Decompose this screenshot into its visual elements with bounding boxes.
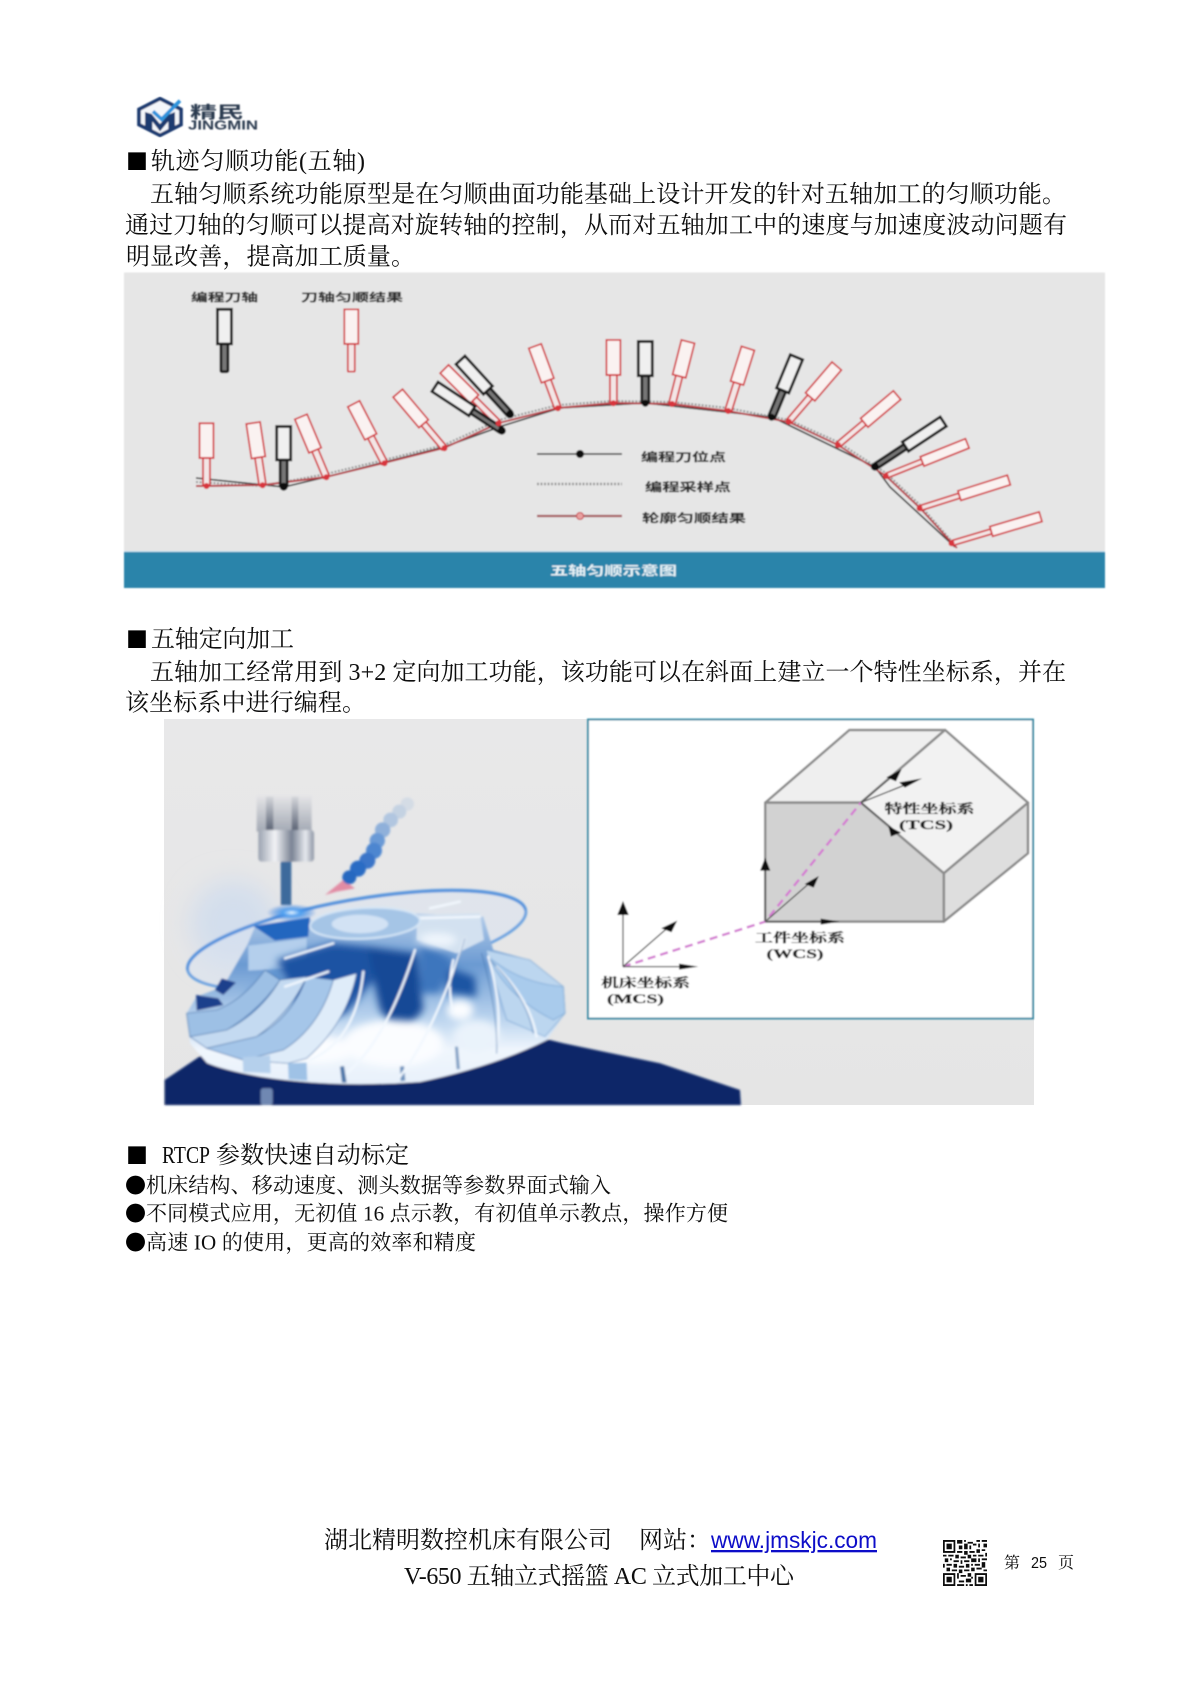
bullet list: ● <box>125 1170 146 1200</box>
shroud ring, rear arc <box>181 870 533 1010</box>
caption band <box>124 551 1105 588</box>
paragraph: trajectory smoothing description <box>125 181 1067 270</box>
coolant hose beads <box>325 797 414 895</box>
right blade group <box>486 950 565 1037</box>
panel: coordinate systems <box>588 720 1033 1018</box>
paragraph: trajectory smoothing description: 明显改善，提高加工质量。 <box>126 244 415 270</box>
spindle holder <box>257 795 314 905</box>
logo wordmark Latin: JINGMIN <box>188 118 258 132</box>
dashed transform links <box>623 803 861 967</box>
impeller body <box>187 913 565 1084</box>
footer product name: V-650 五轴立式摇篮 AC 立式加工中心 <box>404 1563 795 1590</box>
impeller machining illustration <box>165 795 741 1105</box>
legend: contour smoothing result <box>537 511 747 525</box>
label: TCS <box>884 801 975 832</box>
bullet list: 机床结构、移动速度、测头数据等参数界面式输入 <box>146 1174 611 1198</box>
left flared blades <box>187 970 357 1063</box>
shroud ring, front arc <box>188 891 526 970</box>
label: TCS: 特性坐标系 <box>884 801 975 816</box>
bottom blade feet <box>243 1047 460 1083</box>
footer company and website: 网站： <box>639 1527 711 1554</box>
white inset panel <box>588 720 1033 1018</box>
dark notches at the blade tips <box>196 978 236 1011</box>
bright blade faces <box>280 933 500 1067</box>
upper left blade block <box>248 938 307 971</box>
legend: contour smoothing result: 轮廓匀顺结果 <box>642 511 747 525</box>
paragraph: trajectory smoothing description: 五轴匀顺系统功能原型是在匀顺曲面功能基础上设计开发的针对五轴加工的匀顺功能。 <box>150 181 1066 208</box>
figure: five-axis smoothing diagram <box>124 272 1105 588</box>
heading: five-axis positioning: 五轴定向加工 <box>151 626 294 653</box>
legend: programmed tool position <box>537 450 727 464</box>
bullet list: ● <box>125 1198 146 1228</box>
logo: Jingmin <box>139 99 258 135</box>
upper right blade fan <box>417 913 484 953</box>
bullet list: 不同模式应用，无初值 16 点示教，有初值单示教点，操作方便 <box>146 1202 728 1226</box>
legend: programmed tool position: 编程刀位点 <box>641 450 727 464</box>
bullet list <box>125 1170 728 1257</box>
caption band: 五轴匀顺示意图 <box>550 563 677 578</box>
toolpath curves <box>196 401 957 548</box>
legend top: smoothed tool axis: 刀轴匀顺结果 <box>301 290 403 304</box>
heading: trajectory smoothing: ■ <box>126 144 148 176</box>
page number: 25 <box>1031 1555 1047 1572</box>
bullet list: ● <box>125 1227 146 1257</box>
label: WCS: 工件坐标系 <box>755 930 846 945</box>
axis arrows: MCS, WCS, TCS <box>617 769 922 970</box>
dark machine base <box>165 1037 741 1105</box>
smoothed red tools <box>200 340 1042 548</box>
text section 2: five-axis positioning <box>125 622 1066 716</box>
programmed black tools <box>277 342 946 487</box>
paragraph: 3+2 positioning description: 该坐标系中进行编程。 <box>125 690 366 716</box>
icon: QR code <box>943 1540 987 1586</box>
logo icon: hexagon with M and check mark <box>139 99 181 135</box>
logo wordmark Chinese: 精民 <box>190 103 244 122</box>
heading: trajectory smoothing: 轨迹匀顺功能(五轴) <box>151 148 365 175</box>
label: WCS: (WCS) <box>766 947 823 961</box>
heading: RTCP calibration: RTCP <box>162 1143 210 1169</box>
base cylinder detail <box>261 1088 273 1105</box>
legend top: smoothed tool axis <box>301 290 403 372</box>
text section 3: RTCP calibration <box>125 1138 728 1257</box>
label: TCS: (TCS) <box>899 818 953 832</box>
legend: programmed sample points: 编程采样点 <box>645 480 732 494</box>
footer <box>324 1527 1074 1590</box>
cutting glow <box>267 904 317 921</box>
legend top: programmed tool axis <box>191 290 258 372</box>
figure: impeller and coordinate systems <box>164 719 1034 1105</box>
footer company and website: 湖北精明数控机床有限公司 <box>324 1527 612 1554</box>
heading: RTCP calibration <box>126 1138 409 1170</box>
soft shadow behind impeller <box>190 880 277 967</box>
figure background <box>164 719 1034 1105</box>
page number: 页 <box>1058 1554 1074 1572</box>
footer company and website <box>324 1527 877 1554</box>
impeller blade edges <box>285 902 537 1077</box>
legend top: programmed tool axis: 编程刀轴 <box>191 290 258 304</box>
label: MCS <box>601 975 691 1006</box>
diagram background <box>124 272 1105 552</box>
tool position dots <box>204 400 954 546</box>
paragraph: 3+2 positioning description: 五轴加工经常用到 3+2 定向加工功能，该功能可以在斜面上建立一个特性坐标系，并在 <box>150 659 1066 686</box>
label: MCS: 机床坐标系 <box>601 975 691 990</box>
dark blue blade shading <box>243 940 477 1037</box>
workpiece block <box>765 730 1028 922</box>
bullet list: 高速 IO 的使用，更高的效率和精度 <box>146 1230 476 1256</box>
paragraph: 3+2 positioning description <box>125 659 1066 716</box>
page number: 第 <box>1004 1554 1020 1572</box>
heading: RTCP calibration: ■ <box>126 1138 148 1170</box>
label: WCS <box>755 930 846 961</box>
heading: five-axis positioning: ■ <box>126 622 148 654</box>
page number <box>1004 1554 1074 1572</box>
heading: five-axis positioning <box>126 622 294 654</box>
label: MCS: (MCS) <box>607 992 664 1006</box>
paragraph: trajectory smoothing description: 通过刀轴的匀顺可以提高对旋转轴的控制，从而对五轴加工中的速度与加速度波动问题有 <box>125 212 1067 239</box>
footer company and website: www.jmskjc.com <box>710 1527 877 1553</box>
heading: RTCP calibration: 参数快速自动标定 <box>216 1142 409 1169</box>
text section 1: trajectory smoothing <box>125 144 1067 270</box>
cut block and hub <box>253 905 421 942</box>
